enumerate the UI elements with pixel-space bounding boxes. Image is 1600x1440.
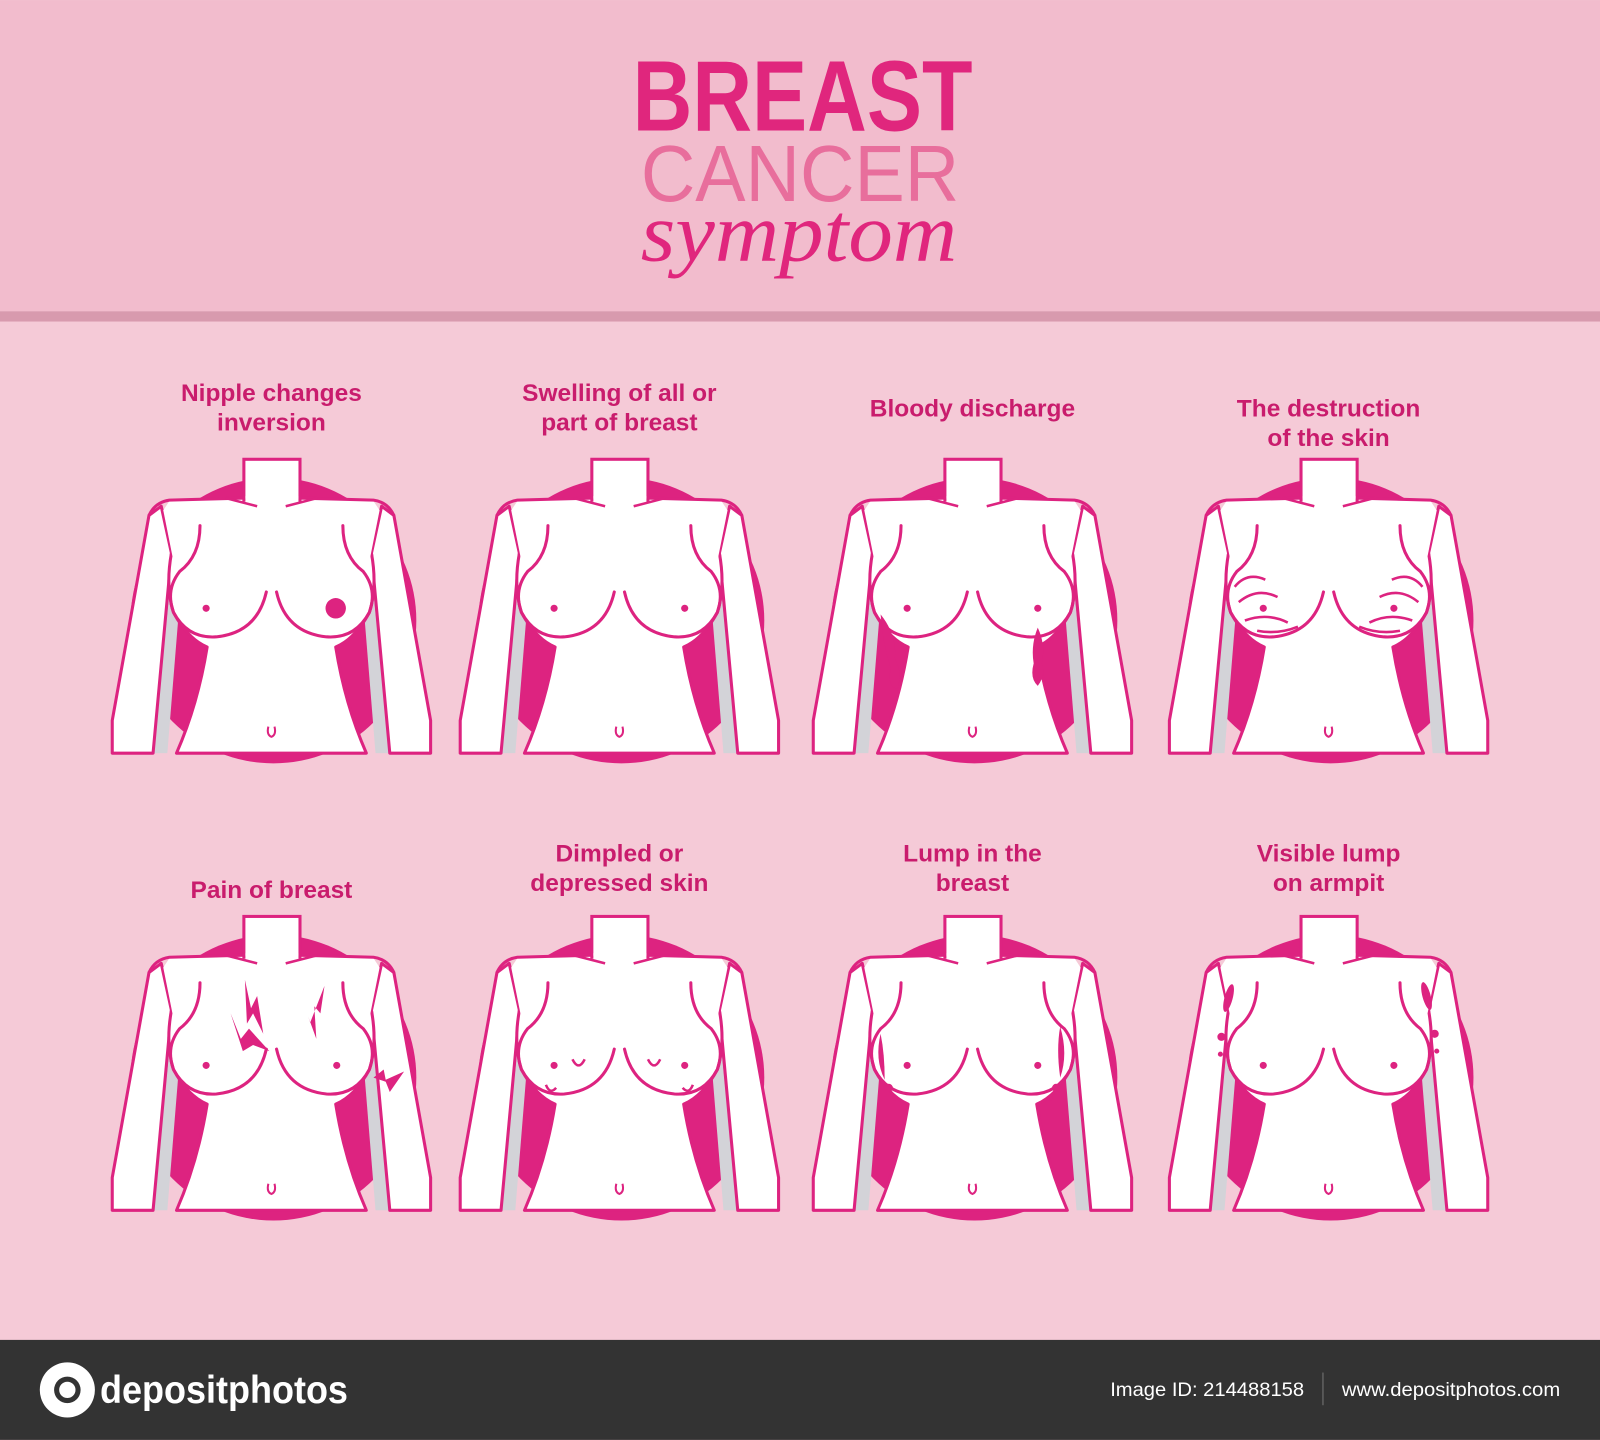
labels row 2: breast	[936, 870, 1009, 897]
labels row 1: of the skin	[1267, 425, 1390, 452]
title: symptom	[641, 186, 957, 279]
title: BREAST	[633, 41, 972, 153]
labels row 1	[181, 380, 1420, 452]
labels row 2: Visible lump	[1257, 840, 1400, 867]
labels row 2: on armpit	[1273, 870, 1384, 897]
figure: destruction of skin	[1169, 459, 1488, 763]
labels row 1: Swelling of all or	[522, 380, 717, 407]
labels row 2: Pain of breast	[191, 877, 352, 904]
figure: pain of breast	[112, 916, 431, 1221]
figure: lump in breast	[813, 916, 1132, 1221]
labels row 2: Lump in the	[903, 840, 1042, 867]
footer	[0, 1340, 1600, 1440]
footer text: Image ID: 214488158	[1110, 1379, 1304, 1401]
labels row 1: inversion	[217, 410, 326, 437]
labels row 1: part of breast	[541, 410, 698, 437]
figure: nipple changes	[112, 459, 431, 763]
title	[633, 41, 972, 279]
logo	[40, 1362, 348, 1417]
figure: bloody discharge	[813, 459, 1132, 763]
title: CANCER	[641, 129, 959, 218]
labels row 2: Dimpled or	[555, 840, 684, 867]
figure: armpit lump	[1169, 916, 1488, 1221]
labels row 1: Nipple changes	[181, 380, 362, 407]
header band	[0, 0, 1600, 311]
footer: www.depositphotos.com	[1341, 1379, 1560, 1401]
labels row 2	[191, 840, 1400, 904]
labels row 1: Bloody discharge	[870, 395, 1075, 422]
labels row 1: The destruction	[1237, 395, 1420, 422]
logo: depositphotos	[100, 1369, 348, 1412]
figure: swelling	[460, 459, 779, 763]
figure: dimpled skin	[460, 916, 779, 1221]
labels row 2: depressed skin	[530, 870, 708, 897]
